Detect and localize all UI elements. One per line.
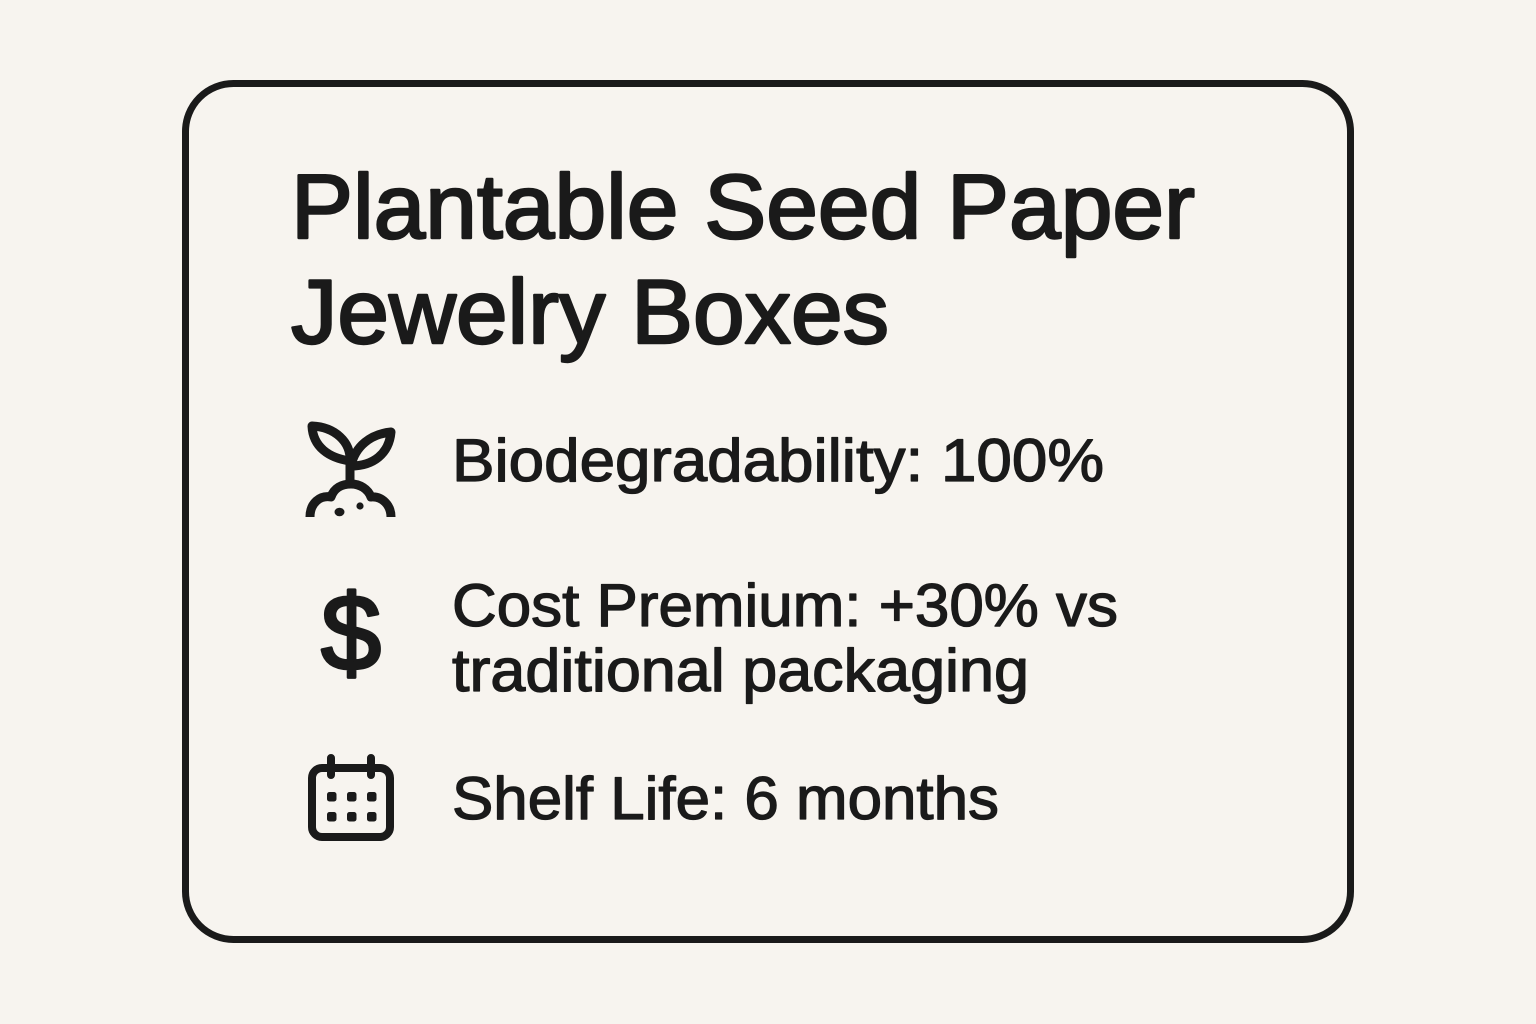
icon: dollar sign: $ — [321, 572, 381, 693]
text: cost premium — [452, 572, 1118, 704]
text: cost premium: traditional packaging — [452, 637, 1029, 704]
text: cost premium: Cost Premium: +30% vs — [452, 572, 1118, 639]
icon: calendar — [312, 758, 390, 837]
text: biodegradability: Biodegradability: 100% — [452, 427, 1104, 494]
title — [291, 157, 1195, 363]
icon: sprout in soil — [310, 426, 391, 517]
title: Jewelry Boxes — [291, 262, 889, 363]
panel: card — [186, 84, 1350, 940]
text: shelf life: Shelf Life: 6 months — [452, 765, 999, 832]
title: Plantable Seed Paper — [291, 157, 1195, 258]
